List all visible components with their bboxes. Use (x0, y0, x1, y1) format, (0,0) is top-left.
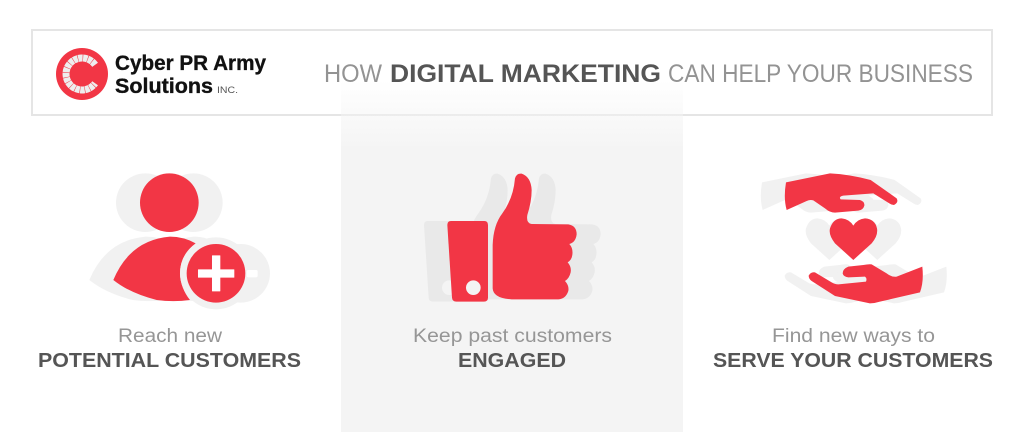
logo wordmark line 2: Solutions (115, 75, 213, 98)
ghost shapes (761, 173, 947, 303)
red head (140, 173, 199, 232)
text: keep past customers engaged: ENGAGED (458, 350, 566, 372)
red body (113, 237, 196, 301)
text: keep past customers engaged (413, 326, 612, 372)
red heart (830, 218, 877, 260)
white ring (180, 237, 252, 309)
text: reach new potential customers (38, 326, 301, 372)
title: DIGITAL MARKETING (390, 60, 661, 88)
logo wordmark line 1: Cyber PR Army (115, 52, 266, 75)
text: find new ways to serve your customers: SERVE YOUR CUSTOMERS (713, 350, 993, 372)
ghost hole (442, 280, 457, 295)
text: find new ways to serve your customers (713, 326, 993, 372)
red cuff (447, 221, 488, 302)
icon: logo mark (56, 48, 108, 100)
icon: person with plus (89, 173, 270, 309)
cuff button (466, 280, 481, 295)
text: keep past customers engaged: Keep past customers (413, 326, 612, 347)
header box (32, 30, 992, 115)
logo suffix: INC. (217, 85, 238, 96)
ghost silhouettes (89, 173, 270, 303)
ghost minus (247, 270, 258, 277)
icon: hands holding heart (761, 173, 947, 303)
plus sign (198, 256, 234, 291)
plus badge (187, 244, 245, 303)
title: HOW (324, 60, 382, 88)
title: CAN HELP YOUR BUSINESS (668, 60, 973, 88)
icon: thumbs up (424, 174, 601, 302)
red bottom hand (809, 264, 923, 303)
title (324, 60, 973, 88)
panel: highlighted centre column (341, 80, 683, 432)
ghost thumbs (424, 174, 601, 302)
text: find new ways to serve your customers: Find new ways to (772, 326, 935, 347)
logo (56, 48, 266, 100)
red thumb (493, 174, 577, 299)
text: reach new potential customers: Reach new (118, 326, 222, 347)
red top hand (785, 173, 897, 213)
text: reach new potential customers: POTENTIAL CUSTOMERS (38, 350, 301, 372)
